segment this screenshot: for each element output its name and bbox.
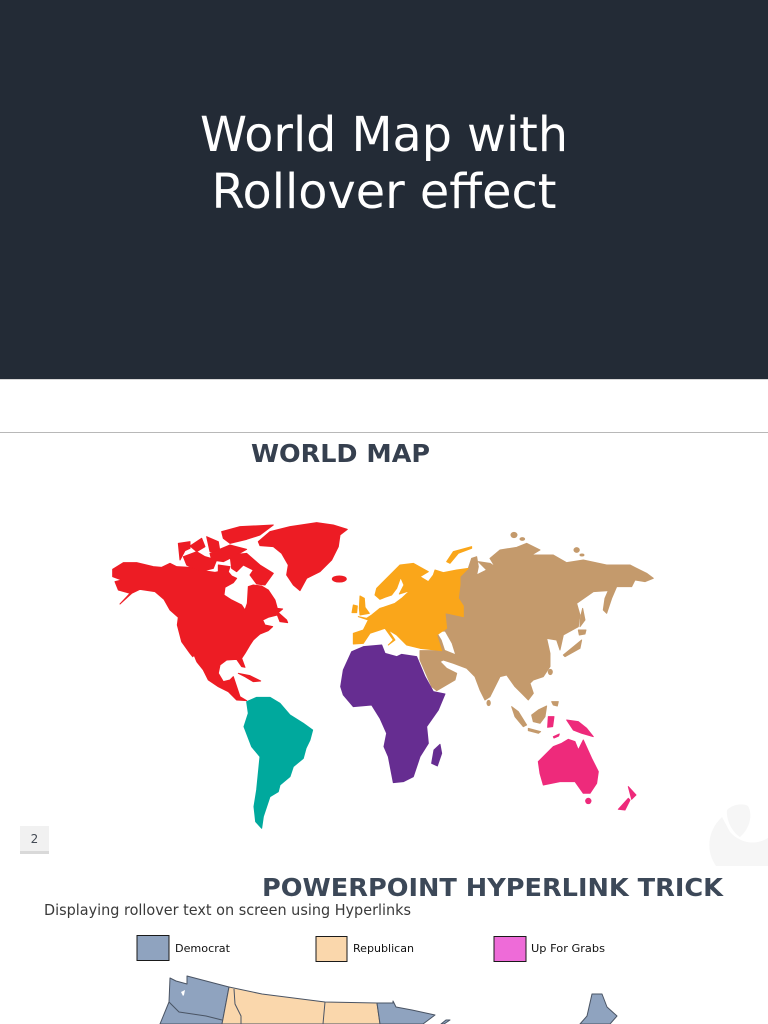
state: minnesota	[377, 1001, 435, 1024]
page number badge: 2	[31, 832, 38, 846]
panel: title slide	[0, 0, 768, 379]
north america	[113, 523, 347, 701]
asia	[420, 532, 653, 733]
title	[200, 107, 568, 220]
legend	[137, 936, 605, 962]
title: Rollover effect	[212, 164, 556, 220]
europe	[352, 547, 472, 651]
south america	[244, 697, 313, 828]
state: maine	[580, 994, 617, 1024]
region: eastern hemisphere	[341, 532, 653, 810]
legend item: democrat: Democrat	[175, 942, 231, 955]
page number badge	[20, 826, 49, 854]
region: americas	[113, 523, 347, 828]
title: World Map with	[200, 107, 568, 163]
world map	[113, 523, 653, 828]
legend item: republican: Republican	[353, 942, 414, 955]
heading: world map: WORLD MAP	[251, 439, 430, 468]
logo watermark	[709, 804, 768, 866]
africa	[341, 645, 445, 783]
legend item: democrat	[137, 936, 231, 960]
legend item: republican	[316, 936, 414, 962]
states: northern plains republican	[222, 987, 380, 1024]
australia and oceania	[538, 717, 636, 810]
us map	[160, 976, 617, 1024]
legend item: up for grabs: Up For Grabs	[531, 942, 605, 955]
legend item: up for grabs	[494, 936, 605, 962]
heading: powerpoint hyperlink trick: POWERPOINT HYPERLINK TRICK	[262, 873, 725, 902]
subtitle text: Displaying rollover text on screen using Hyperlinks	[44, 901, 411, 919]
states: northwest democrat	[160, 976, 229, 1024]
state: michigan edge	[441, 1020, 450, 1024]
